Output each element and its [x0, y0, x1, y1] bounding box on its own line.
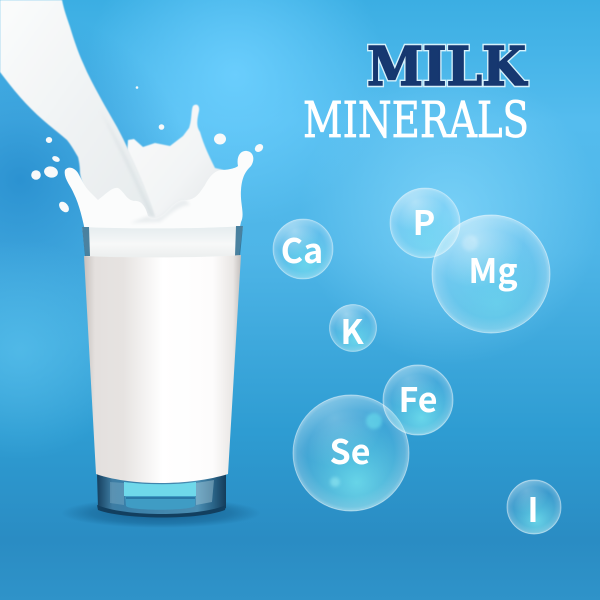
milk stream	[0, 0, 155, 217]
bubble: Mg: Mg	[468, 244, 518, 293]
bubble: K	[330, 304, 376, 354]
front of splash	[65, 151, 253, 236]
title	[303, 36, 529, 149]
bubble: Se: Se	[330, 425, 370, 474]
bubble: I: I	[527, 483, 539, 532]
heading: minerals: MINERALS	[303, 91, 529, 149]
milk droplets	[31, 86, 265, 214]
bubble: K: K	[340, 305, 364, 354]
bubble: Se	[293, 395, 409, 511]
glass rim	[82, 226, 243, 262]
bubbles	[273, 188, 561, 534]
bubble: Mg	[432, 215, 550, 333]
milk body	[84, 255, 241, 483]
bubble: Ca	[273, 219, 333, 279]
glass	[82, 226, 243, 518]
glass base	[97, 474, 226, 516]
stream inner shading	[100, 110, 155, 217]
splash shading	[130, 200, 190, 223]
bubble: P	[390, 188, 460, 258]
bubble: I	[507, 480, 561, 534]
bubble: Fe: Fe	[398, 373, 438, 422]
bubble: Ca: Ca	[281, 224, 323, 273]
heading: milk: MILK	[367, 36, 528, 98]
base inner glow	[124, 482, 196, 510]
bubble: Fe	[383, 365, 453, 435]
glass shadow	[61, 498, 261, 528]
heading: milk: MILK	[367, 36, 528, 98]
bubble: P: P	[413, 196, 435, 245]
back of splash	[125, 105, 224, 225]
